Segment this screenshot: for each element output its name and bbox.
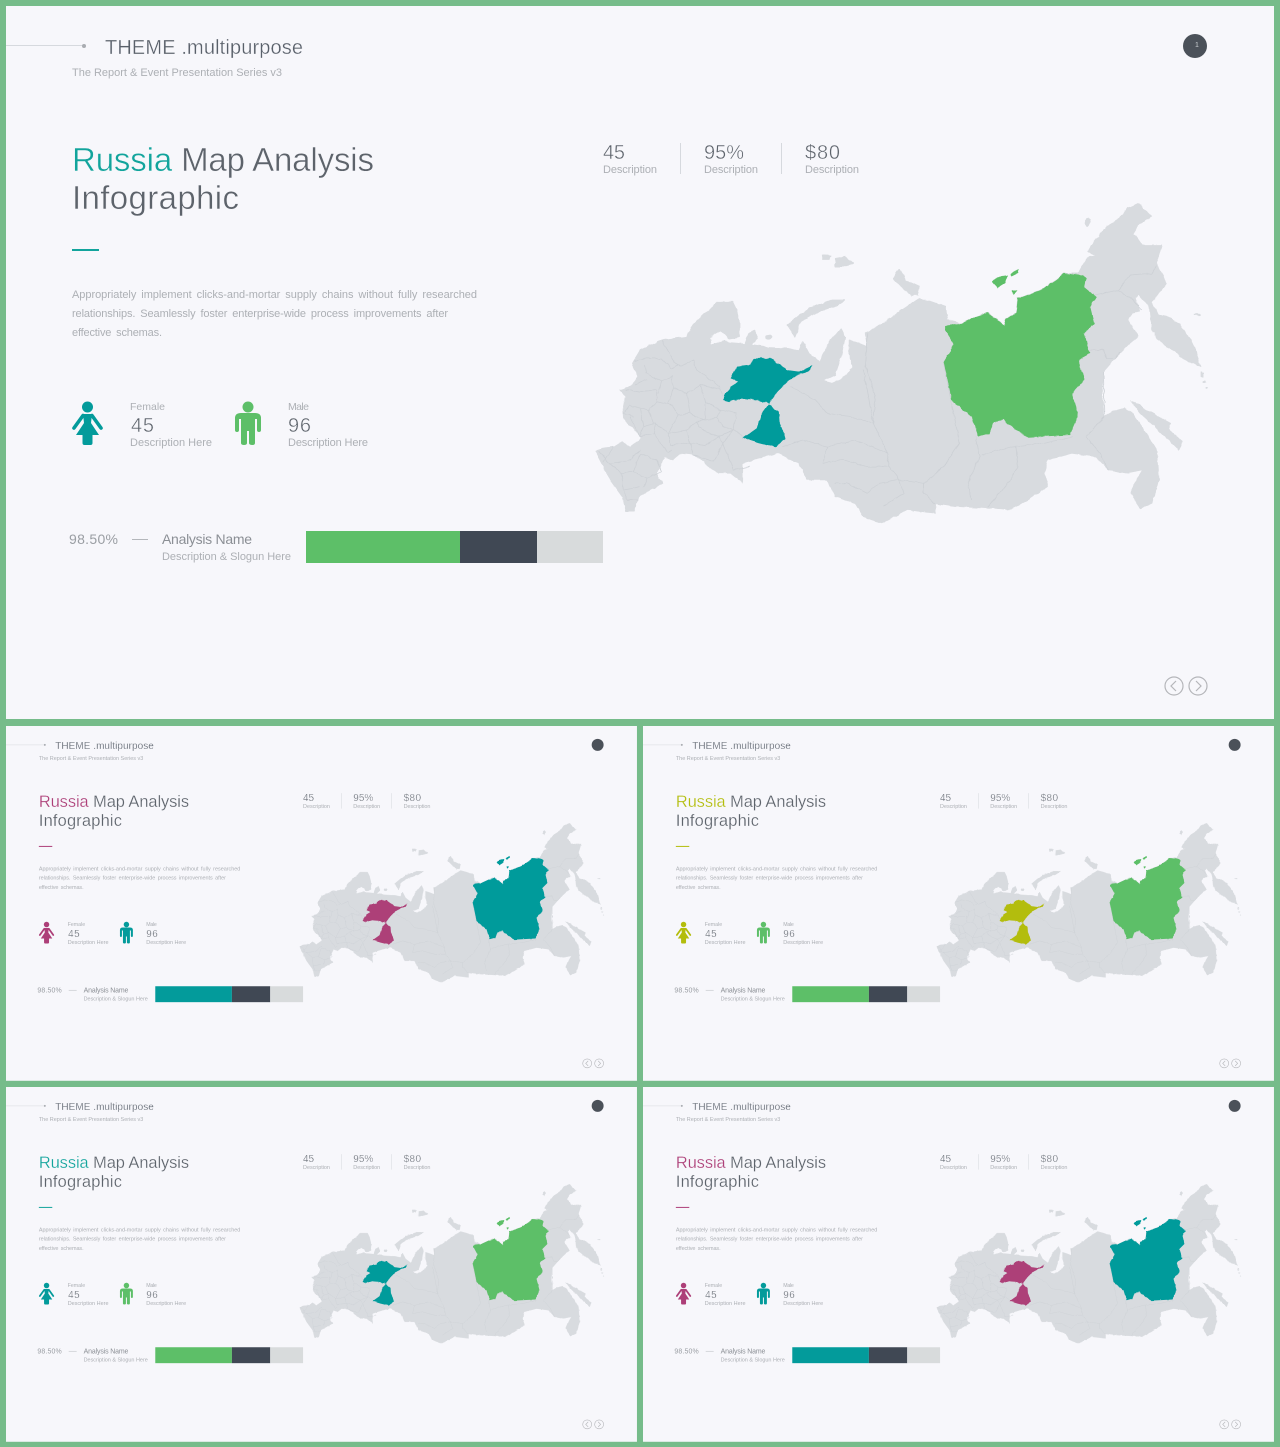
female stat — [677, 1283, 746, 1307]
header: The Report & Event Presentation Series v3 — [39, 756, 143, 762]
header: THEME .multipurpose — [55, 741, 154, 752]
female stat: 45 — [68, 1290, 80, 1301]
navigation arrows — [583, 1420, 604, 1429]
analysis label: Analysis Name — [84, 988, 129, 995]
body text: Appropriately implement clicks-and-mortar supply chains without fully researched — [676, 866, 877, 872]
male stat: Male — [783, 1283, 794, 1289]
map of Russia — [937, 823, 1241, 982]
body text: relationships. Seamlessly foster enterprise-wide process improvements after — [676, 876, 863, 882]
body text: effective schemas. — [676, 885, 721, 891]
top stats: 95% — [353, 1154, 373, 1165]
header: The Report & Event Presentation Series v3 — [676, 756, 780, 762]
title: Infographic — [676, 812, 759, 830]
top stats — [303, 1154, 430, 1171]
analysis label: Description & Slogun Here — [84, 1358, 148, 1364]
top stats — [940, 1154, 1067, 1171]
top stats: 45 — [603, 142, 625, 164]
male stat: Description Here — [783, 1301, 823, 1307]
title: Infographic — [39, 812, 122, 830]
body text — [676, 1227, 877, 1252]
analysis label: 98.50% — [37, 1349, 62, 1356]
top stats: 95% — [704, 142, 744, 164]
header — [6, 1102, 154, 1123]
analysis label: Analysis Name — [721, 1349, 766, 1356]
navigation arrows — [1220, 1059, 1241, 1068]
body text: relationships. Seamlessly foster enterprise-wide process improvements after — [39, 1237, 226, 1243]
header — [6, 37, 303, 79]
title — [39, 793, 189, 847]
female stat: Female — [130, 401, 165, 413]
female stat: 45 — [705, 1290, 717, 1301]
stacked progress bar — [792, 986, 940, 1002]
panel: teal and green slide — [6, 1087, 637, 1442]
title — [72, 141, 374, 251]
analysis label — [37, 988, 148, 1003]
header: THEME .multipurpose — [692, 1102, 791, 1113]
header — [6, 741, 154, 762]
top stats: 45 — [303, 1154, 314, 1165]
header: The Report & Event Presentation Series v3 — [39, 1117, 143, 1123]
page number badge — [1229, 739, 1241, 751]
top stats: $80 — [1041, 1154, 1058, 1165]
body text: Appropriately implement clicks-and-mortar supply chains without fully researched — [39, 1227, 240, 1233]
top stats: 45 — [940, 1154, 951, 1165]
stacked progress bar — [155, 986, 303, 1002]
body text: Appropriately implement clicks-and-mortar supply chains without fully researched — [39, 866, 240, 872]
female stat: Description Here — [68, 940, 109, 946]
header — [643, 741, 791, 762]
female stat: 45 — [68, 929, 80, 940]
top stats: Description — [1041, 804, 1067, 810]
female stat — [40, 922, 109, 946]
top stats — [303, 793, 430, 810]
female stat: Female — [68, 922, 85, 928]
top stats: Description — [1041, 1165, 1067, 1171]
title: Russia Map Analysis — [39, 793, 189, 811]
male stat — [235, 401, 368, 449]
male stat: Male — [288, 401, 309, 413]
header: THEME .multipurpose — [55, 1102, 154, 1113]
male stat: Male — [146, 1283, 157, 1289]
top stats: Description — [603, 164, 657, 176]
top stats: Description — [303, 804, 330, 810]
female stat: Description Here — [705, 940, 746, 946]
analysis label — [37, 1349, 148, 1364]
stacked progress bar — [306, 531, 603, 563]
male stat: 96 — [783, 929, 795, 940]
male stat: 96 — [783, 1290, 795, 1301]
analysis label: 98.50% — [674, 1349, 699, 1356]
male stat: Description Here — [288, 437, 368, 449]
male stat: Description Here — [146, 1301, 186, 1307]
title — [39, 1154, 189, 1208]
body text — [39, 1227, 240, 1252]
title: Infographic — [676, 1173, 759, 1191]
analysis label: 98.50% — [674, 988, 699, 995]
top stats: 45 — [940, 793, 951, 804]
analysis label: Description & Slogun Here — [721, 997, 785, 1003]
top stats: $80 — [404, 793, 421, 804]
title: Russia Map Analysis — [676, 793, 826, 811]
top stats: 95% — [990, 1154, 1010, 1165]
title: Russia Map Analysis — [39, 1154, 189, 1172]
analysis label: Description & Slogun Here — [84, 997, 148, 1003]
top stats: Description — [404, 1165, 430, 1171]
analysis label: 98.50% — [69, 531, 118, 547]
top stats: 95% — [353, 793, 373, 804]
top stats: Description — [990, 1165, 1017, 1171]
page number badge — [1183, 34, 1207, 58]
header: The Report & Event Presentation Series v3 — [676, 1117, 780, 1123]
map of Russia — [300, 1184, 604, 1343]
title — [676, 1154, 826, 1208]
header — [643, 1102, 791, 1123]
analysis label: Analysis Name — [84, 1349, 129, 1356]
navigation arrows — [1165, 677, 1207, 695]
male stat: 96 — [288, 415, 311, 437]
analysis label: 98.50% — [37, 988, 62, 995]
top stats: Description — [353, 1165, 380, 1171]
analysis label — [674, 988, 785, 1003]
top stats — [603, 142, 859, 176]
body text — [72, 289, 477, 339]
panel: magenta and teal slide — [6, 726, 637, 1081]
title: Infographic — [39, 1173, 122, 1191]
map of Russia — [937, 1184, 1241, 1343]
top stats: 45 — [303, 793, 314, 804]
top stats: Description — [704, 164, 758, 176]
map of Russia — [300, 823, 604, 982]
male stat: Male — [146, 922, 157, 928]
top stats — [940, 793, 1067, 810]
analysis label — [69, 531, 291, 563]
male stat — [757, 1283, 823, 1307]
navigation arrows — [1220, 1420, 1241, 1429]
header: THEME .multipurpose — [692, 741, 791, 752]
male stat — [757, 922, 823, 946]
analysis label: Description & Slogun Here — [721, 1358, 785, 1364]
top stats: 95% — [990, 793, 1010, 804]
body text: effective schemas. — [72, 327, 162, 339]
body text: relationships. Seamlessly foster enterprise-wide process improvements after — [676, 1237, 863, 1243]
analysis label: Analysis Name — [162, 531, 252, 547]
female stat — [40, 1283, 109, 1307]
title: Russia Map Analysis — [676, 1154, 826, 1172]
page number badge — [592, 1100, 604, 1112]
panel: magenta and teal slide, second — [643, 1087, 1274, 1442]
female stat: Female — [705, 1283, 722, 1289]
female stat: Description Here — [130, 437, 212, 449]
body text: Appropriately implement clicks-and-mortar supply chains without fully researched — [676, 1227, 877, 1233]
panel: lime and green slide — [643, 726, 1274, 1081]
page number badge — [1229, 1100, 1241, 1112]
body text: effective schemas. — [676, 1246, 721, 1252]
male stat: Male — [783, 922, 794, 928]
analysis label — [674, 1349, 785, 1364]
top stats: Description — [940, 804, 967, 810]
body text — [39, 866, 240, 891]
female stat — [677, 922, 746, 946]
title: Infographic — [72, 179, 239, 216]
page number badge — [592, 739, 604, 751]
male stat: Description Here — [783, 940, 823, 946]
body text: Appropriately implement clicks-and-mortar supply chains without fully researched — [72, 289, 477, 301]
top stats: Description — [353, 804, 380, 810]
female stat: Female — [68, 1283, 85, 1289]
female stat: Female — [705, 922, 722, 928]
female stat — [74, 401, 212, 449]
top stats: $80 — [805, 142, 840, 164]
title: Russia Map Analysis — [72, 141, 374, 178]
header: The Report & Event Presentation Series v3 — [72, 67, 282, 79]
female stat: 45 — [705, 929, 717, 940]
top stats: Description — [404, 804, 430, 810]
navigation arrows — [583, 1059, 604, 1068]
analysis label: Analysis Name — [721, 988, 766, 995]
female stat: 45 — [131, 415, 154, 437]
male stat: Description Here — [146, 940, 186, 946]
male stat: 96 — [146, 929, 158, 940]
header: THEME .multipurpose — [105, 37, 303, 59]
body text: relationships. Seamlessly foster enterprise-wide process improvements after — [39, 876, 226, 882]
top stats: Description — [990, 804, 1017, 810]
male stat — [120, 1283, 186, 1307]
top stats: Description — [940, 1165, 967, 1171]
stacked progress bar — [792, 1347, 940, 1363]
top stats: $80 — [404, 1154, 421, 1165]
stacked progress bar — [155, 1347, 303, 1363]
body text: effective schemas. — [39, 1246, 84, 1252]
top stats: $80 — [1041, 793, 1058, 804]
top stats: Description — [303, 1165, 330, 1171]
body text: relationships. Seamlessly foster enterprise-wide process improvements after — [72, 308, 448, 320]
panel: main slide — [6, 6, 1274, 719]
map of Russia — [596, 203, 1208, 523]
female stat: Description Here — [705, 1301, 746, 1307]
title — [676, 793, 826, 847]
female stat: Description Here — [68, 1301, 109, 1307]
top stats: Description — [805, 164, 859, 176]
body text — [676, 866, 877, 891]
page number badge: 1 — [1195, 42, 1199, 49]
body text: effective schemas. — [39, 885, 84, 891]
male stat — [120, 922, 186, 946]
analysis label: Description & Slogun Here — [162, 551, 291, 563]
male stat: 96 — [146, 1290, 158, 1301]
